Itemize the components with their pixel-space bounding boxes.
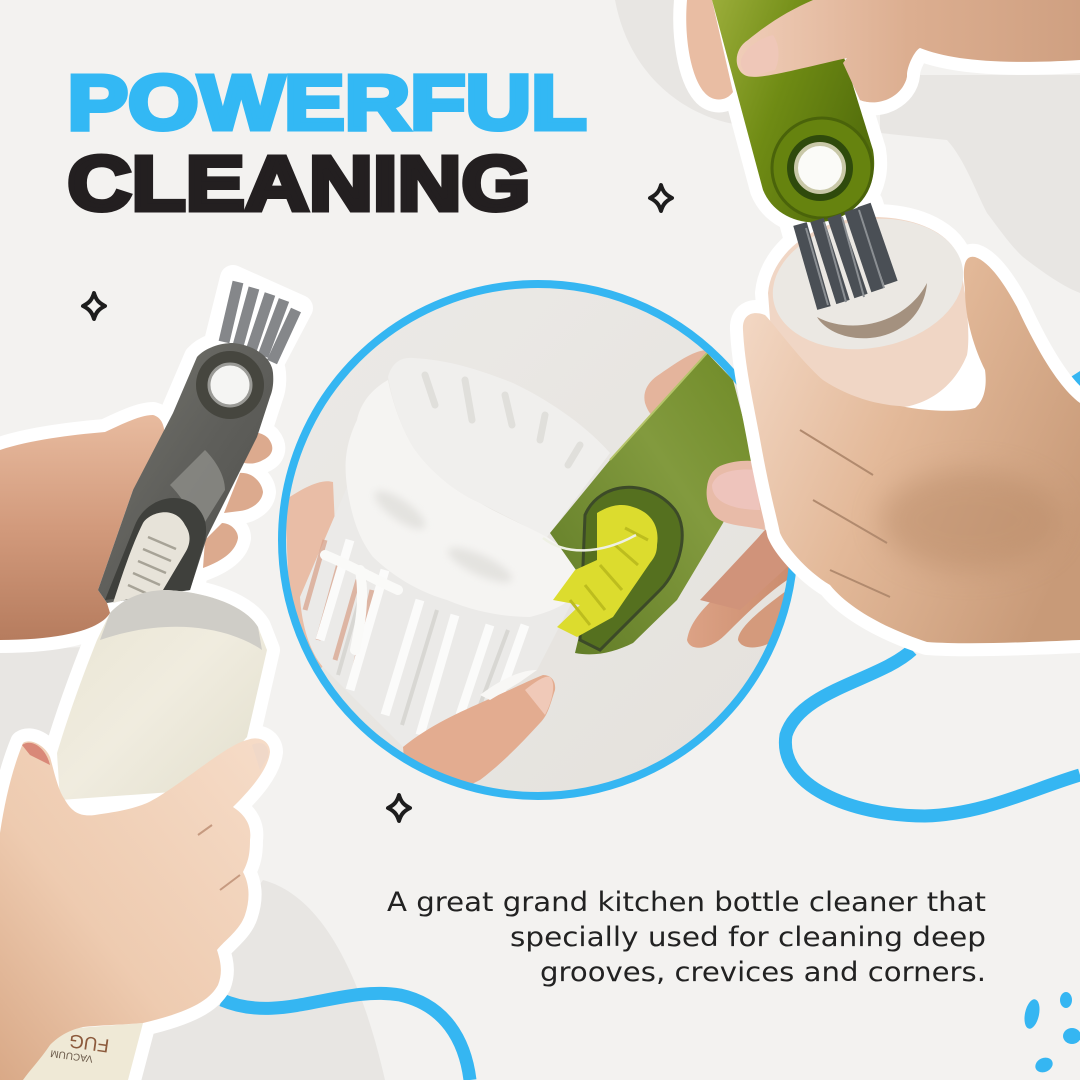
handle ring <box>196 351 264 419</box>
foam band <box>346 380 590 617</box>
upper finger <box>644 350 711 414</box>
back of hand shadow <box>880 470 1060 570</box>
blue squiggle bottom <box>222 993 470 1080</box>
knuckle crease <box>198 825 240 890</box>
title line: cleaning: CLEANING <box>68 141 530 227</box>
title line: powerful: POWERFUL <box>68 60 586 146</box>
thumb nail <box>741 35 779 76</box>
handle light band <box>170 450 225 530</box>
yellow bristles <box>570 528 648 625</box>
title <box>68 60 586 227</box>
photo: cup and bristles <box>762 204 974 408</box>
circular photo: glass cleaning <box>282 284 800 800</box>
photo: top right brush in hand <box>686 0 1080 222</box>
green brush handle <box>550 353 753 654</box>
bristle highlights <box>806 210 884 305</box>
back finger behind glass <box>286 481 334 668</box>
grey bristles <box>800 205 891 308</box>
lens ring <box>772 118 872 218</box>
finger nail <box>252 743 268 770</box>
brand subtext: VACUUM <box>50 1047 94 1064</box>
bottom thumb <box>403 675 556 784</box>
left finger <box>686 0 733 100</box>
blue accent right edge <box>1066 371 1080 395</box>
cup top foam <box>762 204 974 364</box>
line 3: grooves, crevices and corners. <box>540 957 986 988</box>
dark ring around slot <box>580 487 682 650</box>
cup body <box>768 217 968 408</box>
photo: left hand palm <box>0 415 164 640</box>
glass body <box>300 516 340 666</box>
white slider <box>113 512 190 603</box>
red fingertip <box>22 743 50 765</box>
handle highlight edge <box>610 353 707 460</box>
glass rim crossing brush <box>543 535 636 550</box>
thumbnail tint <box>712 470 760 510</box>
brand text: FUG <box>68 1029 111 1056</box>
bottle neck foam <box>100 590 262 650</box>
handle hole <box>796 144 844 192</box>
line 1: A great grand kitchen bottle cleaner that <box>387 887 986 918</box>
slider grooves <box>128 537 176 595</box>
photo: bottle base with label <box>23 1023 143 1080</box>
photo: lower hand holding bottle <box>0 738 270 1080</box>
foam speckle <box>375 491 510 582</box>
glass inner back wall <box>388 358 610 537</box>
photo: fingers behind dark brush <box>203 432 272 568</box>
handle inner ring <box>787 135 853 201</box>
right thumb over handle <box>707 461 765 530</box>
sparkle icons <box>83 185 672 821</box>
description text <box>387 887 986 988</box>
slot ring <box>105 498 206 600</box>
cup brown crescent <box>817 283 927 338</box>
blue ring <box>282 284 794 796</box>
sticker outlines: left cutout <box>0 278 300 1080</box>
top thumb and hand <box>737 0 1080 102</box>
lower right fingers <box>687 530 788 648</box>
handle body <box>712 0 874 222</box>
glass ribs <box>305 540 525 735</box>
handle <box>98 343 273 603</box>
blue squiggle right <box>785 650 1080 816</box>
bristles <box>224 282 296 362</box>
foam on thumb <box>480 670 537 700</box>
photo: right hand holding cup <box>743 257 1080 643</box>
sticker outlines: right cutout <box>686 0 1080 643</box>
rear fingers <box>843 59 907 102</box>
yellow brush head <box>553 505 658 637</box>
thumbnail <box>525 677 553 715</box>
handle hole <box>209 364 251 406</box>
line 2: specially used for cleaning deep <box>510 922 986 953</box>
finger creases <box>800 430 890 597</box>
glass scalloped rim ribs <box>425 375 580 465</box>
photo: bottle with milk <box>57 590 267 800</box>
photo: dark brush <box>98 282 296 603</box>
blue confetti dots <box>1022 992 1080 1075</box>
